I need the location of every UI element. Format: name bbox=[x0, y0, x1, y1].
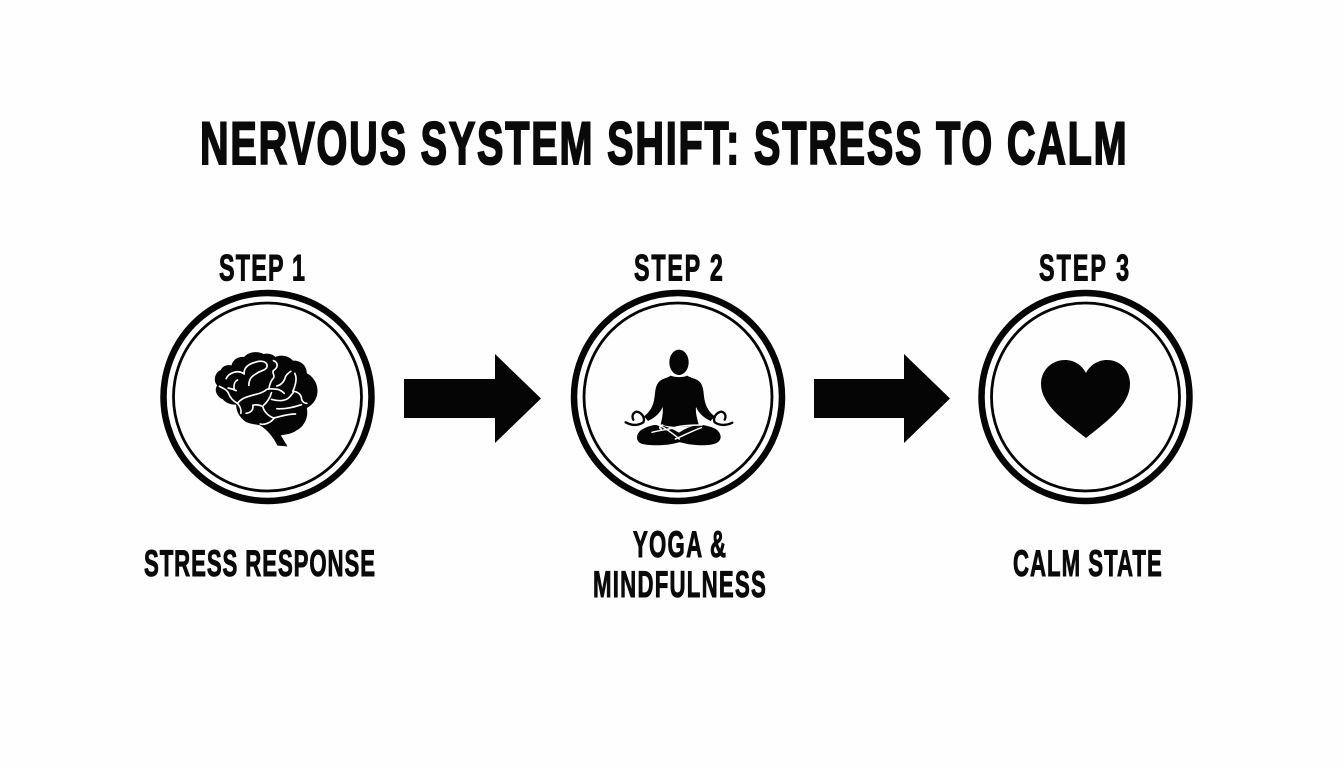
label line 1: YOGA & bbox=[633, 524, 726, 565]
icon: heart bbox=[1041, 360, 1130, 438]
panel: step 1 bbox=[144, 247, 375, 584]
step 3 heading: STEP 3 bbox=[1039, 247, 1129, 289]
step 1 label: STRESS RESPONSE bbox=[144, 543, 375, 584]
step 3 label: CALM STATE bbox=[1013, 543, 1162, 584]
icon: brain bbox=[215, 352, 317, 446]
step 1 double ring bbox=[164, 293, 372, 501]
title: NERVOUS SYSTEM SHIFT: STRESS TO CALM bbox=[200, 110, 1127, 177]
step 2 label bbox=[593, 524, 766, 605]
step 2 double ring bbox=[574, 293, 782, 501]
arrow: step 1 to step 2 bbox=[404, 354, 541, 443]
step 3 double ring bbox=[982, 293, 1190, 501]
arrow: step 2 to step 3 bbox=[814, 354, 950, 443]
panel: step 3 bbox=[982, 247, 1190, 584]
step 2 heading: STEP 2 bbox=[634, 247, 723, 289]
panel: step 2 bbox=[574, 247, 782, 605]
step 1 heading: STEP 1 bbox=[219, 247, 305, 289]
icon: meditating figure bbox=[626, 350, 732, 445]
label line 2: MINDFULNESS bbox=[593, 564, 766, 605]
